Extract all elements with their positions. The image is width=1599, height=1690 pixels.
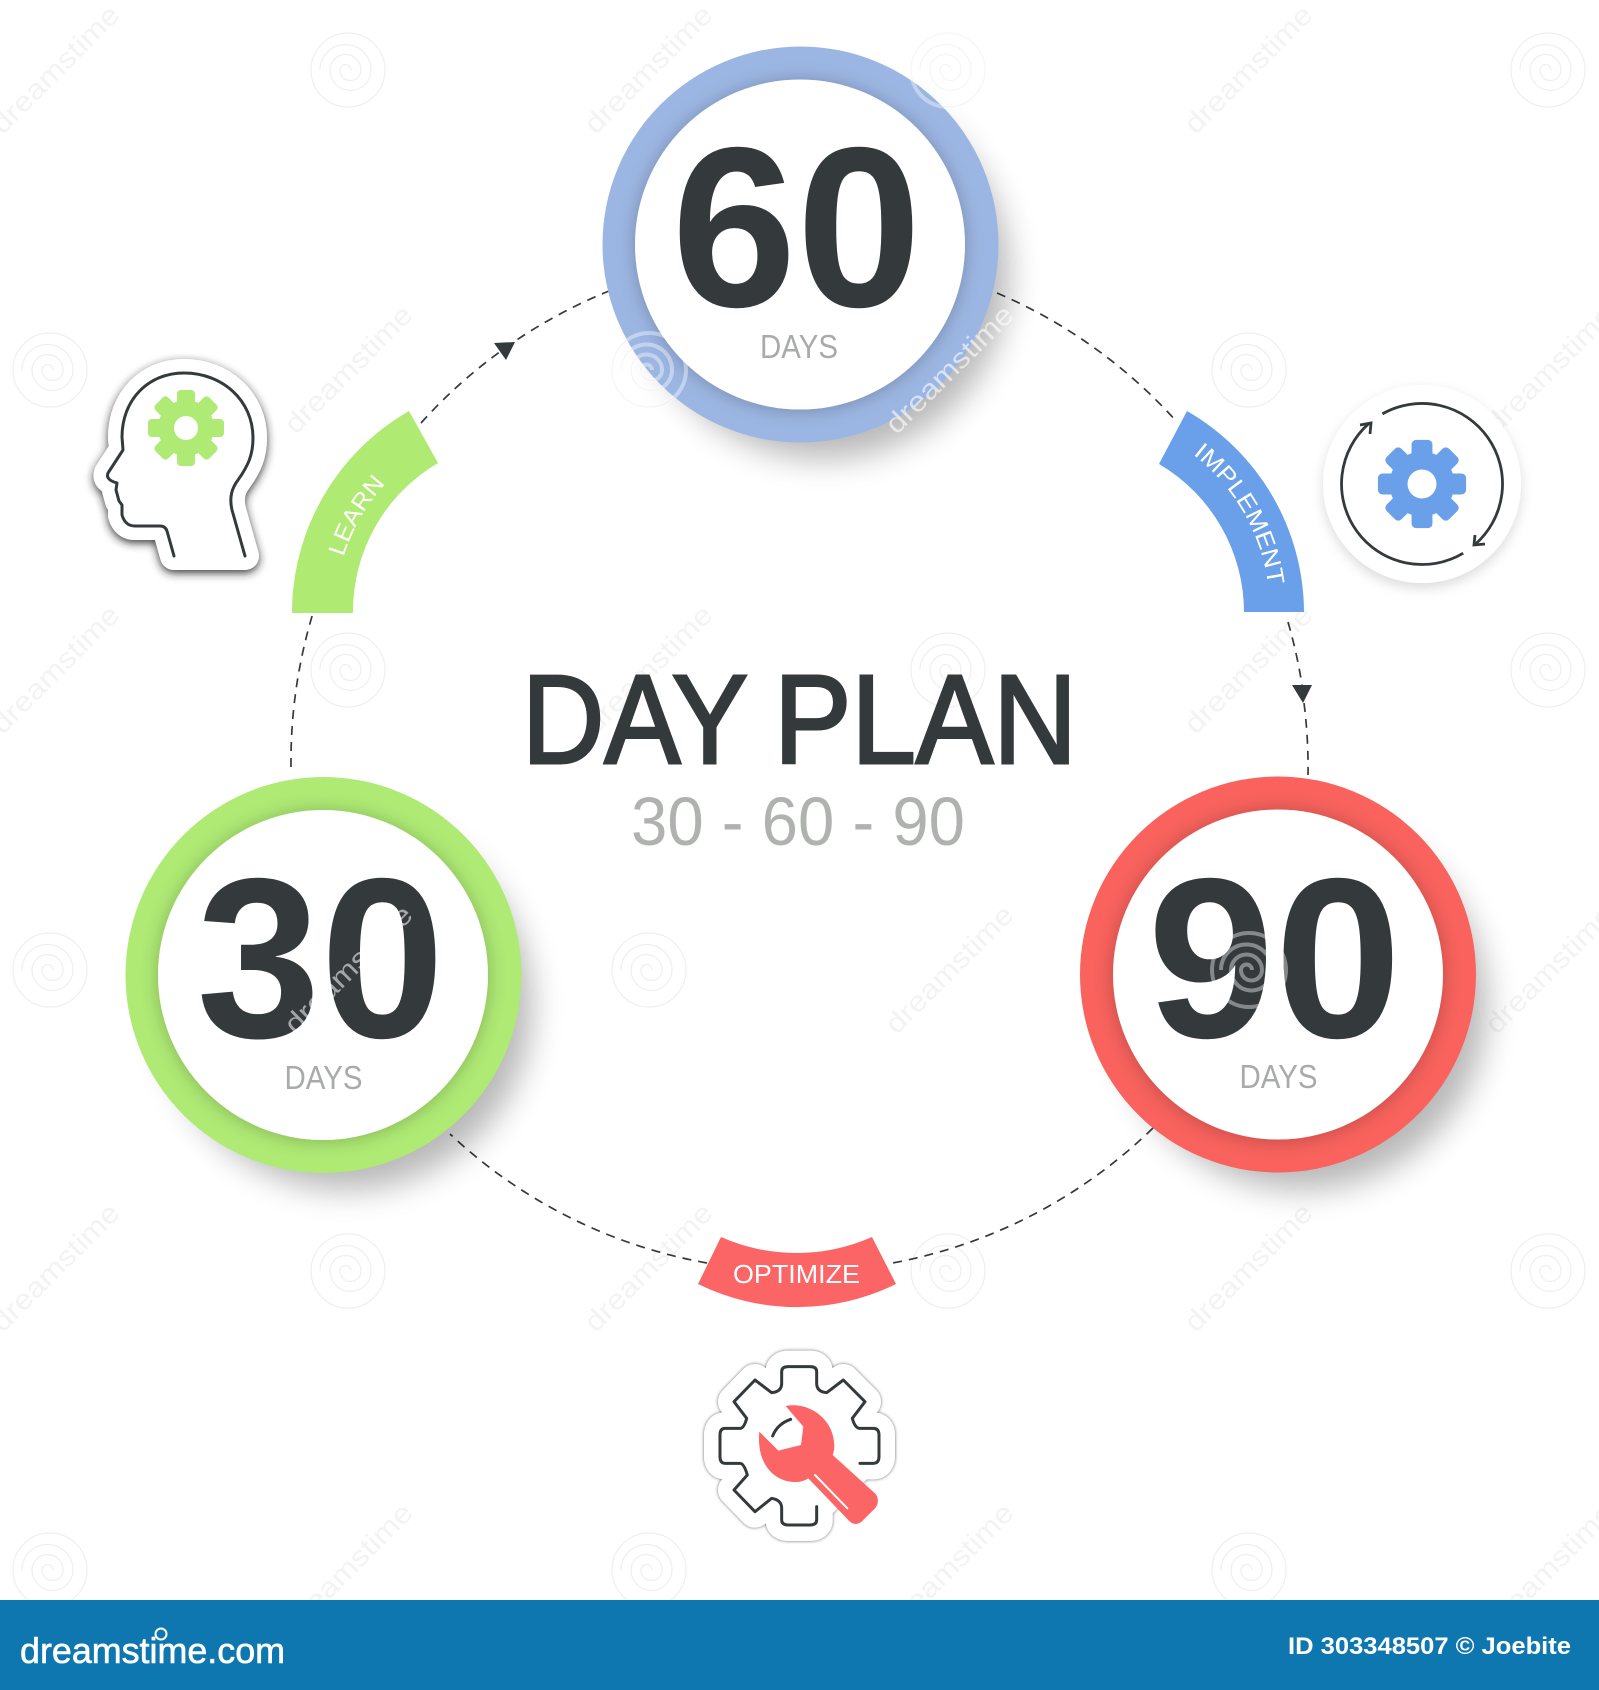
watermark overlay spirals <box>612 33 1286 1007</box>
icon: head with gear <box>107 373 253 556</box>
footer logo: dreamstime.com <box>20 1630 285 1671</box>
days label: DAYS <box>1240 1058 1318 1095</box>
watermark overlay on 60 ring: dreamstime <box>879 299 1020 440</box>
watermark text: dreamstime <box>278 1497 419 1638</box>
watermark text: dreamstime <box>1178 0 1319 140</box>
title: day plan <box>522 649 1077 790</box>
title: day plan: PLAN <box>774 649 1077 790</box>
arrow: to 60 days <box>494 342 515 360</box>
band label: implement: IMPLEMENT <box>1194 443 1284 582</box>
footer credit: ID 303348507 © Joebite <box>1288 1633 1571 1660</box>
number 60: 60 <box>672 101 922 355</box>
circle: 60 days <box>602 46 1009 459</box>
arrow: to 90 days <box>1292 685 1312 703</box>
watermark text: dreamstime <box>879 899 1020 1040</box>
subtitle: 30 - 60 - 90: 30 - 60 - 90 <box>631 783 965 860</box>
days label: DAYS <box>760 328 838 365</box>
number 30: 30 <box>196 832 444 1086</box>
watermark text: dreamstime <box>278 299 419 440</box>
icon: gear with wrench <box>720 1367 879 1525</box>
dashed cycle path <box>291 291 1308 1264</box>
title: day plan: DAY <box>522 649 748 790</box>
band: implement <box>1159 411 1304 612</box>
icon: gear with cycle arrows <box>1323 385 1521 583</box>
watermark text: dreamstime <box>879 1497 1020 1638</box>
circle: 90 days <box>1080 776 1487 1190</box>
band label: optimize: OPTIMIZE <box>733 1259 860 1289</box>
band: optimize <box>698 1237 896 1307</box>
days label: DAYS <box>284 1059 362 1096</box>
band: learn <box>292 411 438 613</box>
number 90: 90 <box>1148 832 1402 1086</box>
watermark text: dreamstime <box>578 599 719 740</box>
watermark text: dreamstime <box>578 1197 719 1338</box>
watermark text: dreamstime <box>1178 1197 1319 1338</box>
circle: 30 days <box>126 777 532 1190</box>
watermark text: dreamstime <box>578 0 719 140</box>
band label: learn: LEARN <box>328 474 384 555</box>
watermark text: dreamstime <box>1178 599 1319 740</box>
footer bar <box>0 1600 1599 1690</box>
watermark overlay on 30 numeral: dreamstime <box>278 899 419 1040</box>
